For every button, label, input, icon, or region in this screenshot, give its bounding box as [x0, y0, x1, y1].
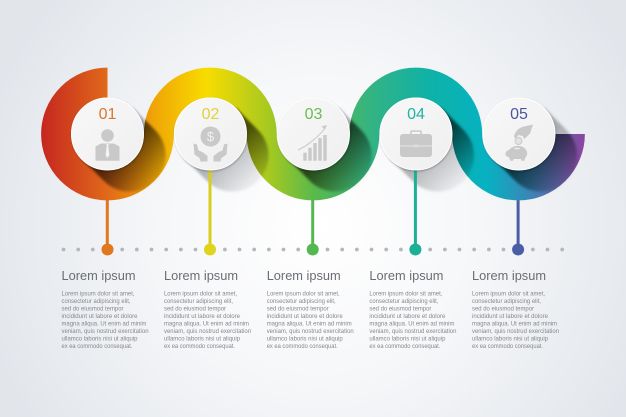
- body 4: incididunt ut labore et dolore: [369, 313, 446, 320]
- body 5: veniam, quis nostrud exercitation: [472, 328, 560, 335]
- step 4 disc: [380, 98, 453, 171]
- body 2: magna aliqua. Ut enim ad minim: [164, 320, 249, 328]
- body 2: ex ea commodo consequat.: [164, 343, 235, 350]
- body 2: incididunt ut labore et dolore: [164, 313, 241, 320]
- gradient wave band: [56, 83, 570, 185]
- body 2: [164, 290, 252, 350]
- dotted timeline: [62, 248, 564, 251]
- body 2: consectetur adipiscing elit,: [164, 298, 233, 305]
- stems and timeline markers: [102, 168, 524, 256]
- dark shadows falling on the band: [82, 108, 577, 192]
- body 1: [62, 290, 149, 350]
- body 2: sed do eiusmod tempor: [164, 306, 226, 312]
- body 5: ex ea commodo consequat.: [472, 343, 543, 350]
- body 4: ex ea commodo consequat.: [369, 343, 441, 350]
- body 1: consectetur adipiscing elit,: [62, 298, 131, 305]
- body 1: Lorem ipsum dolor sit amet,: [62, 290, 135, 298]
- body 4: [369, 290, 457, 350]
- body 5: sed do eiusmod tempor: [472, 306, 534, 312]
- body 5: ullamco laboris nisi ut aliquip: [472, 336, 549, 342]
- number 03: 03: [305, 106, 322, 123]
- body 4: sed do eiusmod tempor: [369, 306, 431, 312]
- body 4: magna aliqua. Ut enim ad minim: [369, 320, 454, 328]
- step 1 disc: [72, 98, 144, 171]
- icon: rising bar chart: [298, 125, 327, 161]
- heading 1: Lorem ipsum: [62, 268, 136, 283]
- body 3: Lorem ipsum dolor sit amet,: [267, 290, 340, 298]
- body 3: ex ea commodo consequat.: [267, 343, 338, 350]
- body 1: magna aliqua. Ut enim ad minim: [62, 320, 146, 328]
- step 4 text: [369, 268, 457, 350]
- heading 2: Lorem ipsum: [164, 268, 238, 283]
- body 5: consectetur adipiscing elit,: [472, 298, 541, 305]
- body 1: veniam, quis nostrud exercitation: [62, 328, 149, 335]
- heading 3: Lorem ipsum: [267, 268, 341, 283]
- body 3: incididunt ut labore et dolore: [267, 313, 343, 320]
- step 2 disc: [174, 98, 247, 171]
- body 1: ex ea commodo consequat.: [62, 343, 133, 350]
- body 3: ullamco laboris nisi ut aliquip: [267, 336, 343, 342]
- body 4: consectetur adipiscing elit,: [369, 298, 439, 305]
- number 04: 04: [407, 106, 425, 123]
- heading 5: Lorem ipsum: [472, 268, 546, 283]
- body 5: [472, 290, 560, 350]
- body 3: magna aliqua. Ut enim ad minim: [267, 320, 352, 328]
- step 1 text: [62, 268, 149, 350]
- heading 4: Lorem ipsum: [369, 268, 443, 283]
- body 2: veniam, quis nostrud exercitation: [164, 328, 252, 335]
- step 3 text: [267, 268, 354, 350]
- body 3: sed do eiusmod tempor: [267, 306, 329, 312]
- icon: briefcase: [400, 131, 432, 157]
- body 5: magna aliqua. Ut enim ad minim: [472, 320, 557, 328]
- body 3: veniam, quis nostrud exercitation: [267, 328, 354, 335]
- body 5: incididunt ut labore et dolore: [472, 313, 549, 320]
- step 5 text: [472, 268, 560, 350]
- body 1: ullamco laboris nisi ut aliquip: [62, 336, 138, 342]
- body 5: Lorem ipsum dolor sit amet,: [472, 290, 545, 298]
- icon: hands holding coin: $: [207, 129, 215, 144]
- icon: hand dropping coin into piggy bank: [505, 124, 533, 161]
- body 4: veniam, quis nostrud exercitation: [369, 328, 457, 335]
- body 1: sed do eiusmod tempor: [62, 306, 124, 312]
- body 3: consectetur adipiscing elit,: [267, 298, 336, 305]
- body 1: incididunt ut labore et dolore: [62, 313, 138, 320]
- step 5 disc: [483, 98, 556, 171]
- body 2: ullamco laboris nisi ut aliquip: [164, 336, 241, 342]
- body 2: Lorem ipsum dolor sit amet,: [164, 290, 237, 298]
- icon: businessman: [96, 129, 120, 161]
- body 4: Lorem ipsum dolor sit amet,: [369, 290, 443, 298]
- step 2 text: [164, 268, 252, 350]
- number 02: 02: [202, 106, 220, 123]
- body 3: [267, 290, 354, 350]
- soft circle shadows on background: [82, 108, 577, 192]
- body 4: ullamco laboris nisi ut aliquip: [369, 336, 446, 342]
- number 05: 05: [510, 106, 528, 123]
- number 01: 01: [99, 106, 116, 123]
- step 3 disc: [278, 98, 350, 171]
